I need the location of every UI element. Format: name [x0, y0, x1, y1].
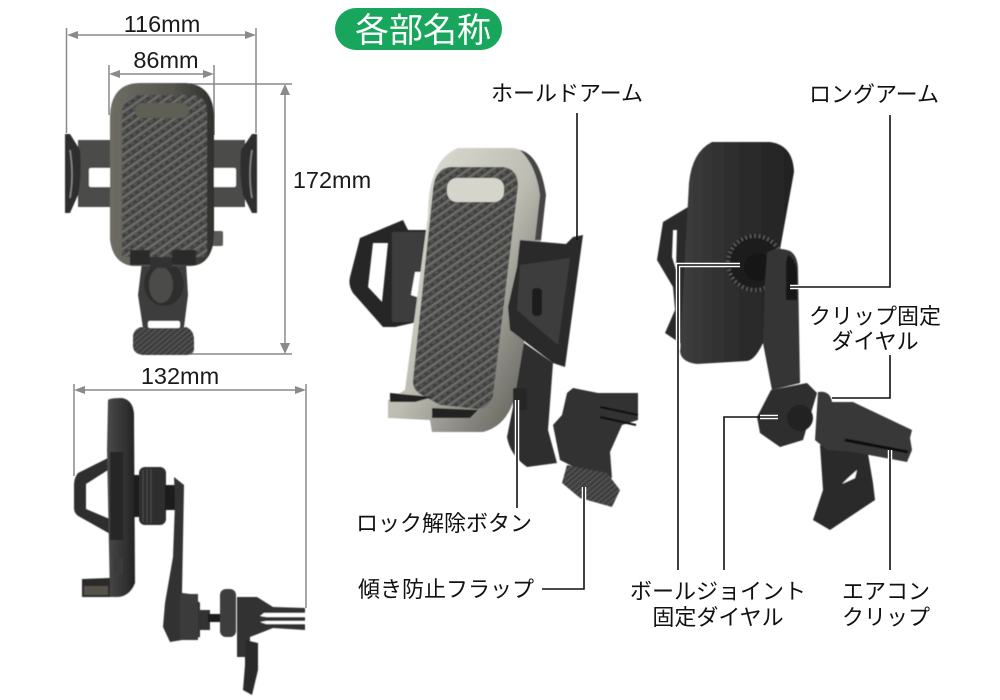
leader: ボールジョイント固定ダイヤル dial	[678, 265, 740, 570]
label: エアコンクリップ: クリップ	[842, 605, 930, 630]
dimension: 86mm	[109, 47, 214, 135]
front holder illustration	[65, 83, 257, 355]
dimension: 132mm: 132mm	[141, 363, 219, 389]
label: 傾き防止フラップ: 傾き防止フラップ	[358, 577, 534, 602]
leader: ロック解除ボタン	[515, 400, 519, 508]
vent clip	[553, 388, 638, 478]
title badge: 各部名称: 各部名称	[355, 12, 491, 50]
clip	[813, 445, 875, 530]
dimension: 116mm: 116mm	[124, 11, 200, 37]
left side claw	[349, 220, 428, 327]
label: ロック解除ボタン: ロック解除ボタン	[356, 511, 532, 536]
dimension: 116mm	[66, 11, 256, 133]
leader: エアコンクリップ	[888, 450, 892, 570]
anti-tilt flap	[562, 465, 620, 507]
leader: 傾き防止フラップ	[542, 487, 584, 589]
leader: ボールジョイント固定ダイヤル joint	[724, 417, 778, 570]
lower arm and joint	[507, 340, 557, 467]
product: rear perspective illustration	[657, 142, 912, 530]
product: front view with dimensions	[65, 11, 371, 355]
leader: クリップ固定ダイヤル	[832, 355, 890, 398]
label: クリップ固定ダイヤル: ダイヤル	[831, 329, 919, 354]
label: ホールドアーム: ホールドアーム	[491, 81, 643, 106]
release button	[513, 388, 527, 410]
dimension: 172mm: 172mm	[293, 167, 371, 193]
leader: ホールドアーム	[576, 113, 578, 240]
dimension: 172mm	[190, 84, 371, 354]
label: ロングアーム: ロングアーム	[809, 82, 939, 107]
phone feet	[390, 393, 478, 418]
dimension: 86mm: 86mm	[133, 47, 199, 73]
product: side view with dimension	[74, 363, 306, 695]
product: front perspective illustration	[349, 148, 638, 507]
dimension: 132mm	[74, 363, 306, 608]
claw	[657, 207, 690, 345]
side holder illustration	[74, 398, 305, 695]
label: ボールジョイント固定ダイヤル: ボールジョイント	[630, 579, 806, 604]
dial knob	[726, 234, 784, 292]
back plate	[680, 142, 794, 364]
silver plate	[388, 148, 545, 432]
ball joint base	[757, 383, 817, 447]
label: クリップ固定ダイヤル: クリップ固定	[809, 304, 941, 329]
long arm	[763, 249, 800, 390]
leader: ロングアーム	[790, 115, 890, 287]
hold arm	[508, 235, 583, 367]
label: ボールジョイント固定ダイヤル: 固定ダイヤル	[652, 605, 784, 630]
label: エアコンクリップ: エアコン	[842, 579, 930, 604]
carbon face	[413, 167, 518, 409]
